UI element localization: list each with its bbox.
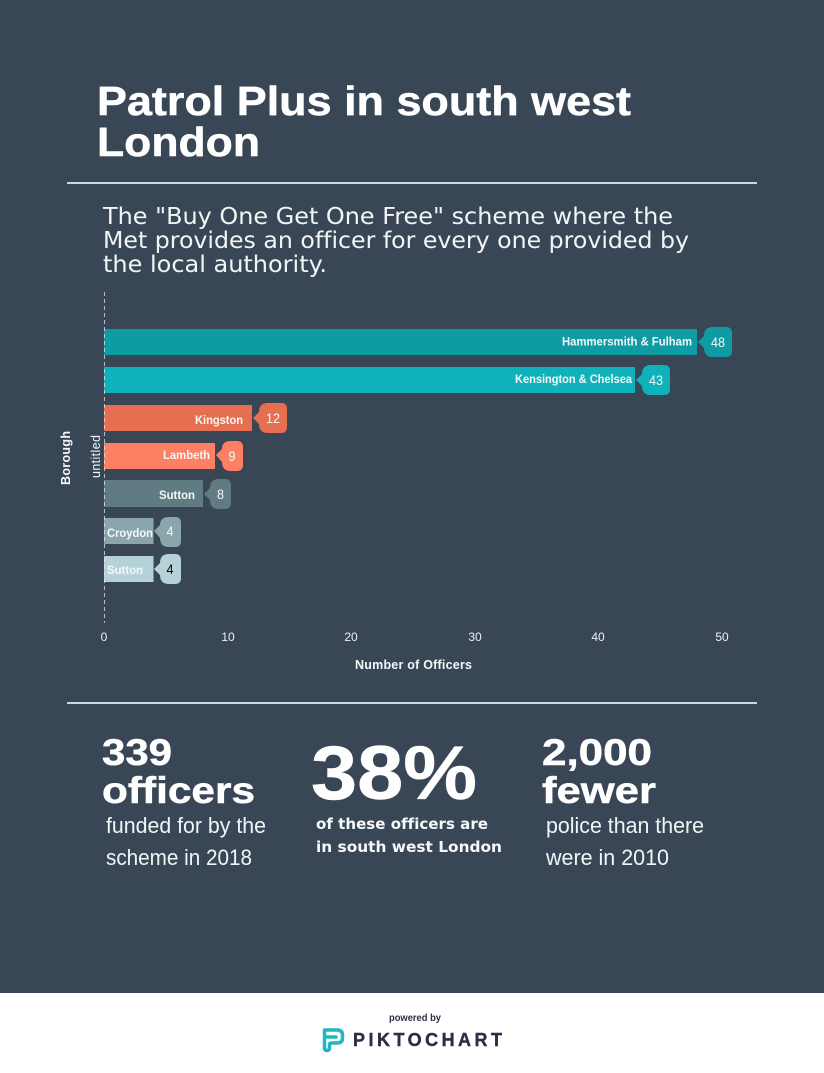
bar: Kingston 12 (104, 403, 287, 433)
bar: Croydon 4: Croydon (107, 528, 153, 540)
x axis ticks (101, 630, 729, 644)
bar: Kensington & Chelsea 43: Kensington & Chelsea (515, 374, 633, 386)
intro text: The "Buy One Get One Free" scheme where the (102, 204, 673, 230)
x axis ticks: 10 (221, 630, 235, 644)
title (97, 78, 631, 165)
x axis ticks: 30 (468, 630, 482, 644)
bar: Hammersmith & Fulham 48: 48 (711, 334, 725, 350)
stat: 2,000 fewer (542, 732, 704, 870)
bar: Lambeth 9 (104, 441, 243, 471)
bar: Sutton 4: 4 (166, 561, 174, 577)
bar: Sutton 4: Sutton (107, 565, 143, 577)
stat: 339 officers: scheme in 2018 (106, 845, 252, 870)
bar: Kensington & Chelsea 43: 43 (649, 372, 663, 388)
bar: Hammersmith & Fulham 48 (104, 327, 732, 357)
x axis ticks: 40 (591, 630, 605, 644)
bar: Croydon 4: 4 (166, 523, 174, 539)
axis title: Number of Officers: Number of Officers (355, 658, 472, 672)
stat: 339 officers: 339 (102, 732, 172, 773)
intro text: Met provides an officer for every one provided by (103, 228, 689, 254)
stat: 2,000 fewer: were in 2010 (545, 845, 669, 870)
stat: 339 officers: officers (102, 770, 255, 811)
bar: Sutton 4 (104, 554, 181, 584)
intro text (102, 204, 689, 278)
intro text: the local authority. (103, 252, 327, 278)
title: London (97, 119, 260, 165)
bar: Kensington & Chelsea 43 (104, 365, 670, 395)
bar chart: officers by borough (59, 292, 732, 672)
bar: Croydon 4 (104, 517, 181, 547)
stat: 38%: in south west London (316, 838, 502, 856)
bar: Kingston 12: 12 (266, 410, 280, 426)
x axis ticks: 0 (101, 630, 108, 644)
stat: 38%: of these officers are (316, 815, 488, 833)
bar: Sutton 8 (104, 479, 231, 509)
icon: Piktochart logo (324, 1030, 342, 1050)
bar: Lambeth 9: 9 (228, 448, 236, 464)
stat: 2,000 fewer: 2,000 (542, 732, 652, 773)
axis title: Borough: Borough (59, 431, 73, 485)
stat: 339 officers (102, 732, 266, 870)
x axis ticks: 20 (344, 630, 358, 644)
bar: Sutton 8: 8 (217, 486, 224, 502)
stat: 38% (311, 731, 502, 856)
axis label: untitled: untitled (89, 435, 103, 478)
stat: 2,000 fewer: police than there (546, 813, 704, 838)
bar: Kingston 12: Kingston (195, 415, 243, 427)
bar: Hammersmith & Fulham 48: Hammersmith & Fulham (562, 336, 692, 348)
powered by: powered by (389, 1013, 441, 1024)
bar: Sutton 8: Sutton (159, 490, 195, 502)
x axis ticks: 50 (715, 630, 729, 644)
stat: 339 officers: funded for by the (106, 813, 266, 838)
bar: Lambeth 9: Lambeth (163, 450, 210, 462)
stat: 38%: 38% (311, 731, 477, 816)
wordmark: PIKTOCHART (353, 1030, 502, 1050)
title: Patrol Plus in south west (97, 78, 631, 124)
footer (0, 993, 824, 1073)
stat: 2,000 fewer: fewer (542, 770, 656, 811)
